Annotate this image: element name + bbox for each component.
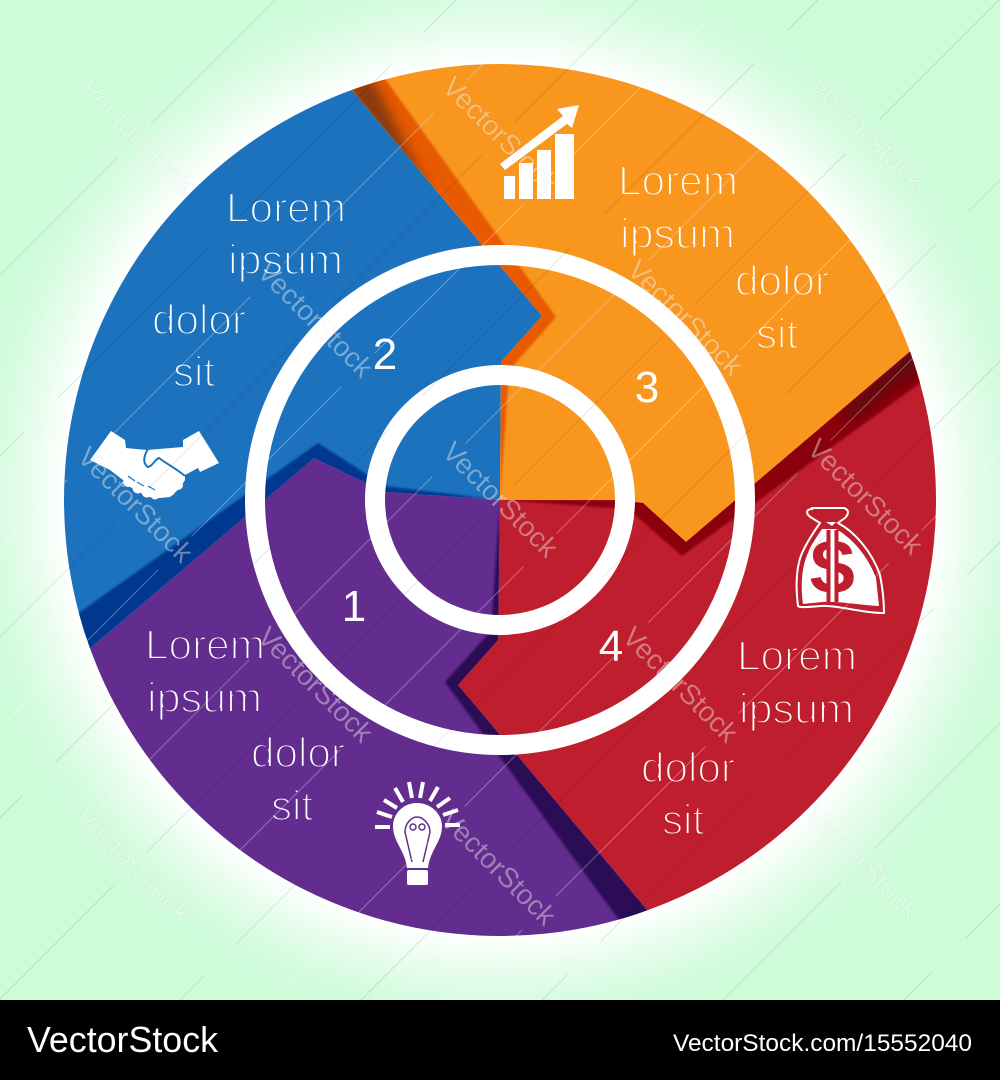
text block: segment 3: dolor [735, 257, 829, 304]
footer brand: VectorStock [27, 1019, 219, 1060]
shadow on red segment [506, 352, 920, 556]
shadow on orange segment [352, 79, 556, 495]
text block: segment 4: dolor [641, 744, 735, 791]
text block: segment 4: ipsum [739, 685, 854, 732]
text block: segment 2: ipsum [228, 236, 343, 283]
watermark text: VectorStock [72, 441, 200, 569]
text block: segment 2: sit [173, 348, 215, 395]
watermark text: VectorStock [799, 798, 927, 926]
text block: segment 4: Lorem [737, 632, 857, 679]
text block: segment 1 [145, 621, 345, 829]
watermark text: VectorStock [622, 254, 750, 382]
watermark text: VectorStock [74, 73, 202, 201]
watermark text: VectorStock [617, 621, 745, 749]
watermark text: VectorStock [252, 256, 380, 384]
icon: money bag: S [808, 528, 857, 608]
footer bar [0, 1000, 1000, 1080]
segment 1: purple [90, 458, 648, 936]
watermark text: VectorStock [435, 804, 563, 932]
shadow on blue segment [78, 442, 494, 648]
text block: segment 2 [152, 184, 346, 395]
watermark text: VectorStock [804, 69, 932, 197]
inner white ring [375, 375, 625, 625]
shadow on purple segment [444, 505, 648, 920]
watermark text: VectorStock [70, 801, 198, 929]
icon: light bulb [375, 782, 460, 885]
text block: segment 3: Lorem [618, 157, 738, 204]
text block: segment 4 [641, 632, 857, 843]
text block: segment 1: ipsum [147, 674, 262, 721]
watermark text: VectorStock [252, 621, 380, 749]
segment 3: orange [352, 64, 910, 542]
watermark text: VectorStock [437, 436, 565, 564]
outer white ring [255, 255, 745, 745]
watermark text [70, 69, 932, 932]
number 1: 1 [342, 582, 366, 631]
number 2: 2 [373, 330, 397, 379]
text block: segment 3: sit [756, 310, 798, 357]
number 3: 3 [635, 363, 659, 412]
text block: segment 2: Lorem [226, 184, 346, 231]
watermark text: VectorStock [437, 71, 565, 199]
watermark text: VectorStock [802, 433, 930, 561]
text block: segment 2: dolor [152, 296, 246, 343]
icon: money bag [797, 508, 884, 613]
segment 2: blue [64, 90, 542, 648]
icon: handshake [90, 431, 219, 500]
number 4: 4 [599, 622, 623, 671]
segment 4: red [458, 352, 936, 910]
text block: segment 4: sit [662, 796, 704, 843]
circular diagram [64, 64, 936, 936]
text block: segment 3: ipsum [620, 210, 735, 257]
text block: segment 1: dolor [251, 729, 345, 776]
footer image reference: VectorStock.com/15552040 [673, 1030, 972, 1057]
text block: segment 1: sit [271, 782, 313, 829]
icon: growth bar chart with arrow [500, 105, 579, 199]
text block: segment 3 [618, 157, 829, 357]
text block: segment 1: Lorem [145, 621, 265, 668]
